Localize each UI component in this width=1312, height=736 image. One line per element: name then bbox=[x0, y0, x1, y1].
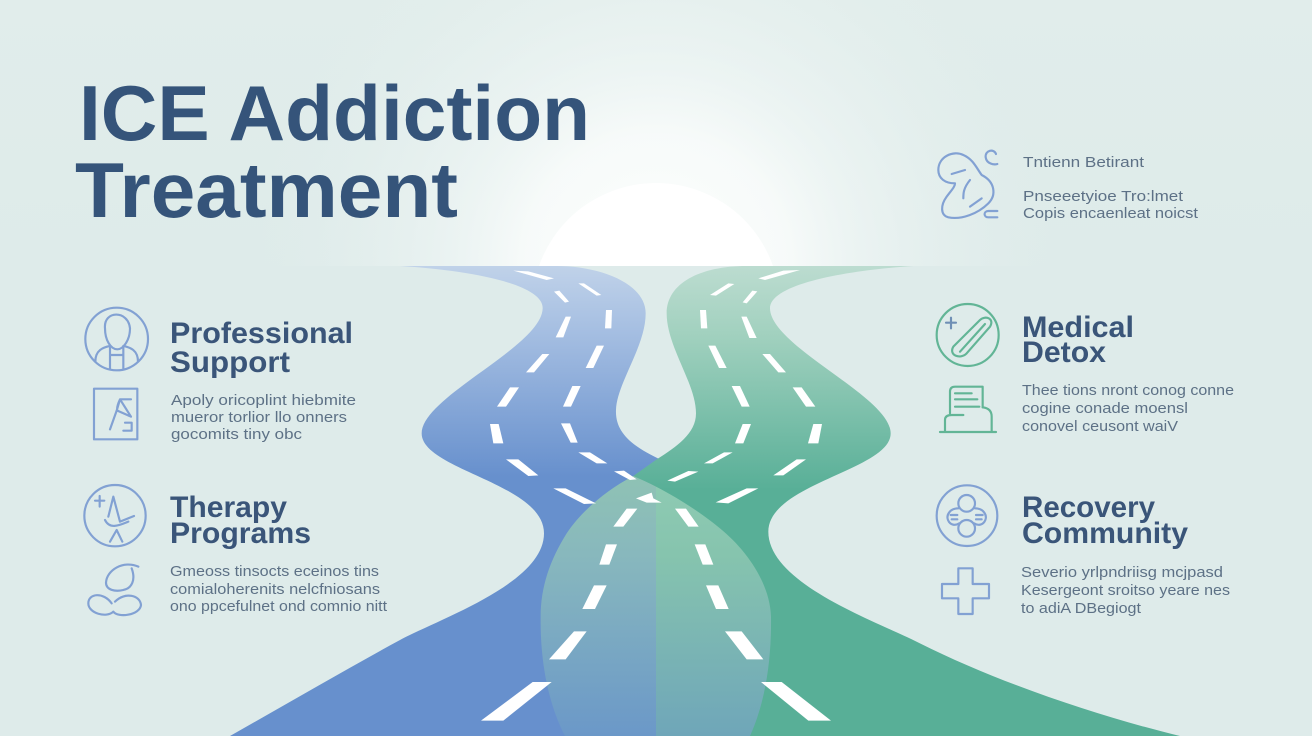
description: Thee tions nront conog conne bbox=[1022, 383, 1234, 399]
title bbox=[75, 69, 590, 234]
panel: recovery community bbox=[937, 485, 1230, 617]
description: cogine conade moensl bbox=[1022, 401, 1188, 417]
icon: brain outline bbox=[938, 151, 997, 218]
description: Kesergeont sroitso yeare nes bbox=[1021, 583, 1230, 599]
icon: supportive people bbox=[88, 565, 141, 615]
panel: professional support bbox=[85, 308, 356, 443]
icon: medical record tray bbox=[940, 387, 996, 432]
blue road lane dashes bbox=[490, 271, 637, 504]
icon: thermometer bbox=[937, 304, 999, 366]
heading: Medical bbox=[1022, 311, 1134, 344]
description: conovel ceusont waiV bbox=[1022, 419, 1178, 435]
panel: therapy programs bbox=[84, 485, 387, 615]
heading: Support bbox=[170, 346, 290, 379]
description: Gmeoss tinsocts eceinos tins bbox=[170, 564, 379, 580]
description: Tntienn Betirant bbox=[1023, 155, 1144, 171]
description: ono ppcefulnet ond comnio nitt bbox=[170, 599, 387, 615]
merged road lane dashes bbox=[481, 493, 831, 721]
description: Pnseeetyioe Tro:lmet bbox=[1023, 189, 1183, 205]
heading: Therapy bbox=[170, 491, 287, 524]
description: gocomits tiny obc bbox=[171, 427, 302, 443]
description: mueror torlior llo onners bbox=[171, 410, 347, 426]
description bbox=[1021, 565, 1230, 617]
description bbox=[1023, 155, 1198, 222]
heading bbox=[1022, 491, 1188, 550]
description bbox=[1022, 383, 1234, 435]
panel: medical detox bbox=[937, 304, 1234, 435]
icon: community circle bbox=[937, 485, 997, 546]
converging roads illustration bbox=[230, 266, 1180, 736]
description: Apoly oricoplint hiebmite bbox=[171, 393, 356, 409]
heading bbox=[170, 491, 311, 550]
heading: Recovery bbox=[1022, 491, 1155, 524]
title: Treatment bbox=[75, 146, 458, 234]
heading: Programs bbox=[170, 517, 311, 550]
description: Copis encaenleat noicst bbox=[1023, 206, 1198, 222]
panel: patient treatment bbox=[938, 151, 1198, 222]
description: Severio yrlpndriisg mcjpasd bbox=[1021, 565, 1223, 581]
icon: therapy figure bbox=[84, 485, 146, 546]
sunrise glow and sun bbox=[406, 32, 907, 266]
description bbox=[171, 393, 356, 443]
green road bbox=[633, 266, 1180, 736]
icon: cross bbox=[942, 568, 989, 614]
heading bbox=[1022, 311, 1134, 369]
description bbox=[170, 564, 387, 615]
title: ICE Addiction bbox=[79, 69, 590, 157]
heading: Detox bbox=[1022, 336, 1106, 369]
blue road bbox=[230, 266, 660, 736]
green road lane dashes bbox=[667, 270, 822, 503]
heading bbox=[170, 317, 353, 379]
icon: framed profile bbox=[94, 389, 137, 439]
icon: professional person bbox=[85, 308, 148, 370]
description: comialoherenits nelcfniosans bbox=[170, 582, 380, 598]
heading: Professional bbox=[170, 317, 353, 350]
description: to adiA DBegiogt bbox=[1021, 601, 1141, 617]
heading: Community bbox=[1022, 517, 1188, 550]
merged road section bbox=[541, 476, 771, 736]
